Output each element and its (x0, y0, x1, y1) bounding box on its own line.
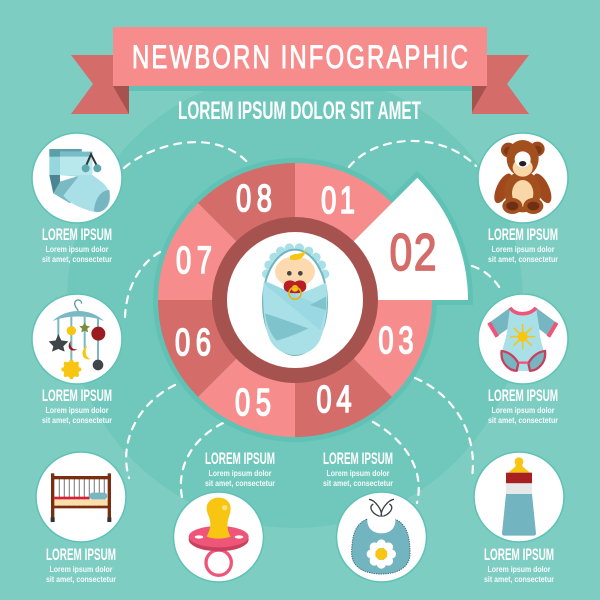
segment 05 (198, 300, 295, 437)
item: crib mobile (32, 294, 122, 425)
title: NEWBORN INFOGRAPHIC (132, 39, 468, 75)
icon: mobile (49, 300, 105, 379)
label: mobile: LOREM IPSUM (42, 387, 112, 405)
segment 06 (158, 300, 295, 397)
icon: bear (491, 140, 555, 214)
number 02: 02 (390, 223, 436, 281)
segment 08 (198, 163, 295, 300)
label: crib: LOREM IPSUM (46, 546, 116, 564)
wheel halo (153, 158, 437, 442)
icon: pacifier (189, 498, 249, 575)
dashed connectors (124, 141, 502, 503)
ribbon tail left (71, 55, 129, 114)
icon circle: pacifier (174, 492, 264, 582)
description: socks: sit amet, consectetur (42, 254, 113, 264)
icon circle: crib (36, 452, 126, 542)
label: pacifier: LOREM IPSUM (205, 450, 275, 468)
description: crib: sit amet, consectetur (46, 574, 117, 584)
description: bear: sit amet, consectetur (488, 254, 559, 264)
segment 02 highlighted (295, 178, 468, 300)
icon: onesie (488, 308, 557, 371)
segment 03 (295, 300, 432, 397)
highlighted wedge outline (295, 178, 468, 300)
icon circle: mobile (32, 294, 122, 384)
icon circle: onesie (478, 294, 568, 384)
ribbon fold right (472, 86, 487, 112)
description: pacifier (205, 468, 276, 488)
description: crib (46, 564, 117, 584)
inner ring (220, 224, 370, 376)
segment 07 (158, 203, 295, 300)
subtitle: LOREM IPSUM DOLOR SIT AMET (178, 97, 421, 125)
ribbon body (113, 27, 487, 86)
number 01: 01 (321, 180, 355, 222)
label: bib: LOREM IPSUM (323, 450, 393, 468)
description: bottle: Lorem ipsum dolor (488, 564, 551, 574)
large background circle (67, 72, 523, 528)
number 04: 04 (316, 379, 352, 421)
description: bear (488, 244, 559, 264)
item: onesie (478, 294, 568, 425)
description: bear: Lorem ipsum dolor (492, 244, 555, 254)
item: socks (32, 133, 122, 264)
number 07: 07 (176, 240, 212, 282)
description: mobile: sit amet, consectetur (42, 415, 113, 425)
description: bib: Lorem ipsum dolor (326, 468, 390, 478)
segmented wheel (153, 158, 468, 442)
description: bib: sit amet, consectetur (323, 478, 394, 488)
description: onesie: sit amet, consectetur (488, 415, 559, 425)
number 05: 05 (235, 382, 271, 424)
item: bib (323, 450, 426, 582)
description: socks: Lorem ipsum dolor (46, 244, 109, 254)
title ribbon (71, 27, 529, 114)
number 06: 06 (175, 322, 211, 364)
icon circle: bib (336, 492, 426, 582)
number 08: 08 (236, 178, 272, 220)
description: onesie (488, 405, 559, 425)
number 03: 03 (378, 320, 414, 362)
icon circle: bear (478, 133, 568, 223)
icon: bottle (502, 457, 536, 536)
description: pacifier: sit amet, consectetur (205, 478, 276, 488)
segment 04 (295, 300, 392, 437)
label: bottle: LOREM IPSUM (484, 546, 554, 564)
description: bib (323, 468, 394, 488)
item: bottle (474, 452, 564, 584)
icon: swaddled baby (262, 243, 329, 355)
ribbon tail right (472, 55, 529, 114)
item: crib (36, 452, 126, 584)
ribbon fold left (113, 86, 129, 114)
icon circle: socks (32, 133, 122, 223)
description: bottle: sit amet, consectetur (484, 574, 555, 584)
icon: socks (49, 149, 110, 212)
description: bottle (484, 564, 555, 584)
description: crib: Lorem ipsum dolor (50, 564, 113, 574)
ribbon shadow (129, 86, 472, 91)
segment 01 (295, 163, 392, 300)
description: pacifier: Lorem ipsum dolor (208, 468, 272, 478)
icon circle: bottle (474, 452, 564, 542)
label: socks: LOREM IPSUM (42, 226, 112, 244)
icon: bib (352, 499, 410, 574)
description: mobile: Lorem ipsum dolor (46, 405, 109, 415)
description: mobile (42, 405, 113, 425)
item: pacifier (174, 450, 276, 582)
item: teddy bear (478, 133, 568, 264)
icon: crib (51, 473, 111, 522)
description: onesie: Lorem ipsum dolor (492, 405, 555, 415)
description: socks (42, 244, 113, 264)
